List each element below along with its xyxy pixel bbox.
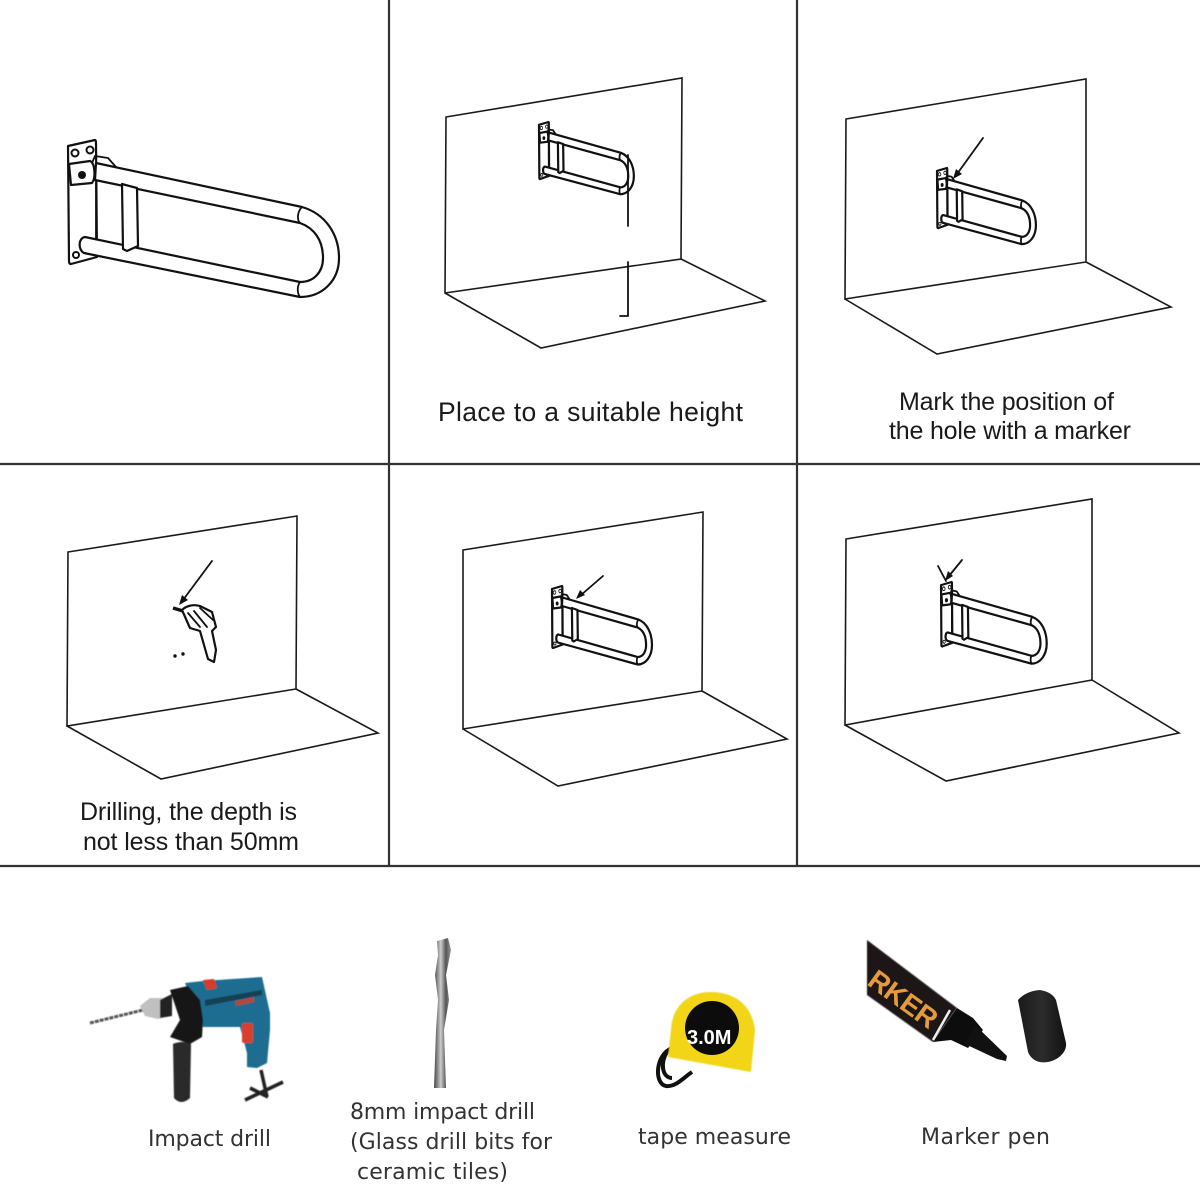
panel: fix with screwdriver [845,499,1179,781]
red trigger [242,1023,253,1043]
plumb line [620,155,628,316]
drill bit image [434,938,451,1088]
caption: Mark the position of [899,388,1114,416]
label: tape measure [638,1125,791,1150]
caption: Drilling, the depth is [80,798,297,826]
label: Impact drill [148,1127,271,1152]
icon: hand drill [173,605,216,662]
grab bar on wall [937,168,1036,244]
room [845,79,1171,354]
room [67,516,378,779]
barrel lettering: RKER [862,964,944,1035]
strap [658,1048,692,1086]
panel: drilling [67,516,378,856]
drill holes [173,652,185,658]
chuck [140,998,170,1019]
caption: not less than 50mm [83,828,299,856]
arrow: drill point [179,561,212,605]
red power switch [203,979,217,990]
grab bar at trial height [539,122,634,194]
label: 8mm impact drill [350,1100,535,1125]
tool: marker pen [862,940,1066,1150]
pen collar [933,1008,983,1048]
pen barrel [867,940,957,1042]
drill image [90,977,283,1102]
tool: tape measure [638,992,791,1150]
label: Marker pen [921,1125,1050,1150]
black dial [685,1001,739,1055]
blue body [185,977,270,1068]
caption: Place to a suitable height [438,397,744,427]
yellow case [668,992,755,1072]
grab bar on wall [941,582,1047,664]
grid frame [0,0,1200,866]
room [845,499,1179,781]
depth stop [245,1070,283,1100]
panel: grab bar product [68,140,339,297]
drill bit [90,1010,143,1023]
room [445,78,765,348]
tool: 8mm impact drill bit [350,938,553,1184]
black collar [170,986,203,1044]
grab bar on wall [552,586,652,664]
arrow: screw [576,576,603,599]
label: (Glass drill bits for [350,1130,553,1155]
pen tip [965,1025,1007,1061]
dial text: 3.0M [687,1027,731,1049]
arrow and screw mark [938,560,962,581]
room [463,512,787,786]
panel: place to a suitable height [438,78,765,427]
pen cap [1018,990,1066,1062]
side handle [173,1042,191,1102]
caption: the hole with a marker [889,417,1131,445]
panel: fix upper screw [463,512,787,786]
maker label [235,997,254,1006]
panel: mark the hole position [845,79,1171,445]
arrow: marker [953,138,983,179]
tool: impact drill [90,977,283,1152]
